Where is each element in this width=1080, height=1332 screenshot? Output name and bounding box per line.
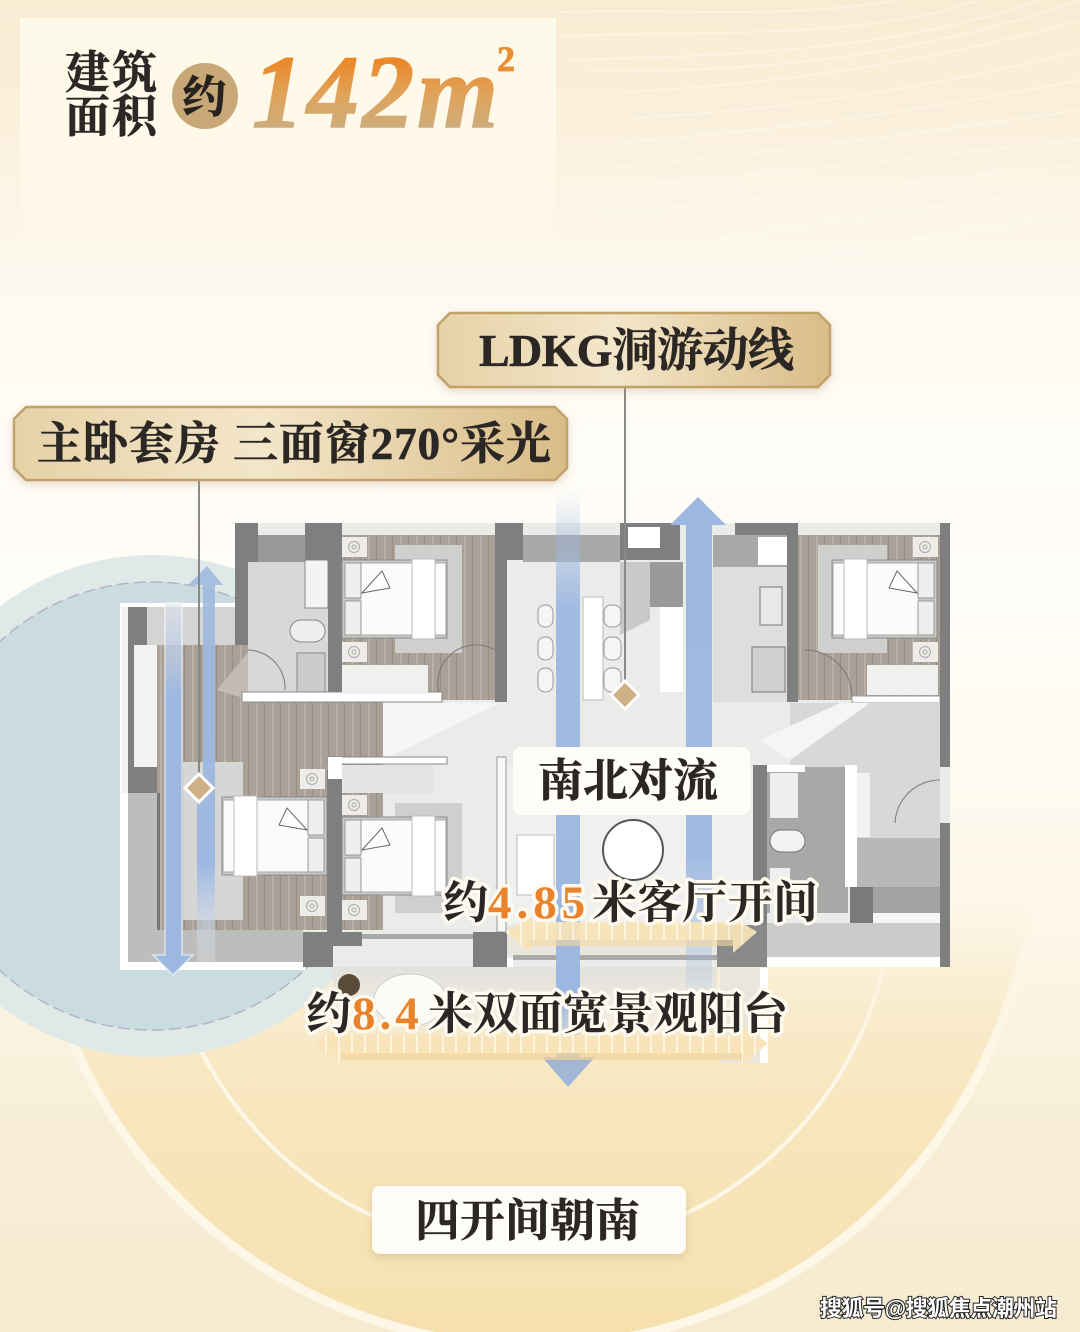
north-east bedroom: [760, 523, 950, 967]
area number: 2: [497, 39, 515, 79]
text: living room width: 约: [443, 878, 488, 928]
dining and kitchen: [523, 523, 798, 702]
pale blue circle: [0, 555, 403, 1057]
badge: approx: 约: [182, 73, 226, 122]
heading: building area: 建筑: [65, 48, 159, 98]
callout: master suite: [14, 407, 567, 802]
label: north-south airflow: [513, 747, 750, 815]
label: four bays south: [372, 1186, 686, 1254]
badge: approx: [172, 63, 238, 129]
airflow arrow: left up: [188, 566, 223, 965]
arrow: balcony width: [316, 1026, 768, 1066]
text: balcony width: 约: [306, 989, 351, 1039]
airflow arrow: left down: [153, 603, 193, 975]
lower bath and entry: [753, 765, 940, 967]
callout: LDKG circulation: LDKG洞游动线: [479, 325, 794, 376]
watermark: 搜狐号@搜狐焦点潮州站: [820, 1296, 1057, 1321]
airflow arrow: main down: [542, 490, 595, 1087]
background contour lines: [560, 0, 1080, 262]
master suite: [235, 523, 523, 702]
text: living room width: 4.85: [488, 877, 590, 929]
text: living room width: [443, 877, 818, 929]
airflow arrow: main up: [670, 497, 726, 1010]
area number: 142m: [252, 35, 498, 150]
plan base floors: [120, 523, 950, 970]
floor plan: [120, 523, 950, 1063]
text: living room width: 米客厅开间: [592, 878, 818, 928]
lower bedrooms: [222, 757, 513, 968]
gold ring background: [33, 346, 1033, 1332]
south balcony: [333, 967, 768, 1063]
living room: [507, 765, 767, 967]
label: four bays south: 四开间朝南: [415, 1196, 640, 1246]
title panel: [20, 18, 556, 248]
callout: master suite: 主卧套房 三面窗270°采光: [37, 419, 551, 469]
callout: LDKG circulation: [438, 313, 830, 709]
label: north-south airflow: 南北对流: [538, 756, 719, 806]
text: balcony width: 8.4: [352, 988, 423, 1040]
arrow: living room width: [505, 917, 757, 953]
heading: building area: 面积: [65, 92, 161, 142]
text: balcony width: 米双面宽景观阳台: [428, 989, 790, 1039]
heading: building area: [65, 48, 161, 142]
